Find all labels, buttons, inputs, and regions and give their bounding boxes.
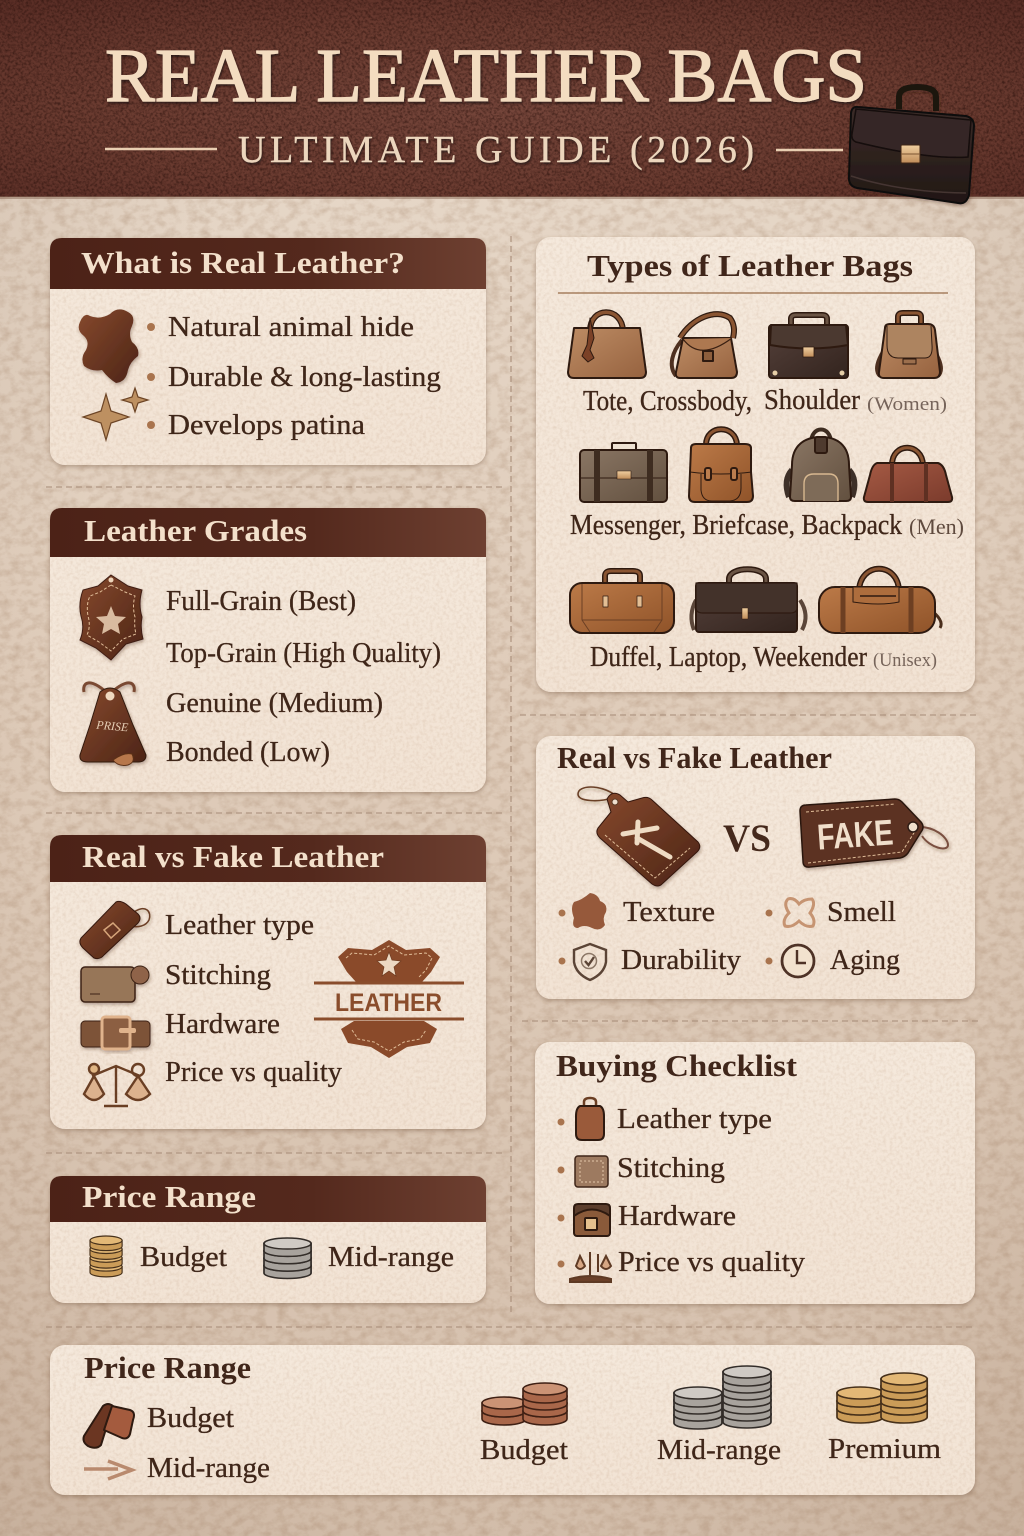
icon: shield check xyxy=(574,944,606,980)
heading: Real vs Fake Leather xyxy=(82,839,384,874)
icon: laptop bag xyxy=(691,569,806,632)
icon: hardware bag xyxy=(574,1204,610,1236)
text: top-grain: Top-Grain (High Quality) xyxy=(166,638,441,669)
text: premium label: Premium xyxy=(828,1434,941,1465)
panel: leather grades xyxy=(50,508,486,792)
icon: red duffel xyxy=(864,448,952,502)
icon: price bell tag: PRISE xyxy=(95,718,130,734)
icon: belt buckle xyxy=(81,1017,150,1049)
icon: gold coins xyxy=(837,1373,927,1423)
icon: clock xyxy=(782,945,814,977)
icon: backpack xyxy=(787,430,854,501)
panel: price range (bottom) xyxy=(50,1345,975,1495)
icon: black briefcase xyxy=(849,87,974,203)
text: shoulder: Shoulder xyxy=(764,385,861,416)
icon: star hide tag xyxy=(80,575,143,660)
icon: crossbody bag xyxy=(672,314,737,378)
text: stitching: Stitching xyxy=(165,960,271,991)
icon: fake leather tag xyxy=(800,799,948,867)
panel card xyxy=(50,508,486,792)
icon: messenger bag xyxy=(580,443,667,502)
header banner xyxy=(0,0,1024,203)
text: budget label: Budget xyxy=(480,1435,568,1466)
icon: real leather tag xyxy=(578,787,700,886)
icon: luggage tag xyxy=(80,901,150,959)
icon: duffel bag xyxy=(570,571,674,633)
icon: fake leather tag: FAKE xyxy=(816,811,895,858)
text: leather type: Leather type xyxy=(617,1104,772,1135)
icon: stitched square xyxy=(575,1156,608,1187)
icon: scales xyxy=(84,1064,150,1106)
text: mid-range label: Mid-range xyxy=(657,1435,781,1466)
text: hardware: Hardware xyxy=(165,1009,280,1040)
text: unisex: (Unisex) xyxy=(873,650,937,671)
heading: Buying Checklist xyxy=(556,1048,798,1083)
icon: arrow xyxy=(84,1461,132,1479)
text: patina: Develops patina xyxy=(168,410,366,441)
panel: types of leather bags xyxy=(536,237,975,692)
panel card xyxy=(50,1345,975,1495)
text: budget: Budget xyxy=(140,1242,227,1273)
text: durable: Durable & long-lasting xyxy=(168,362,441,393)
heading: Types of Leather Bags xyxy=(587,248,913,283)
text: price vs quality: Price vs quality xyxy=(165,1057,342,1088)
panel card xyxy=(50,238,486,465)
icon: women's backpack xyxy=(877,313,941,378)
subtitle: ULTIMATE GUIDE (2026) xyxy=(238,129,754,171)
text: mid-range: Mid-range xyxy=(328,1242,454,1273)
icon: copper coins xyxy=(482,1383,567,1425)
text: durability: Durability xyxy=(621,945,741,976)
text: texture: Texture xyxy=(623,897,715,928)
icon: gold coin stack xyxy=(90,1236,122,1277)
panel: price range (left) xyxy=(50,1176,486,1303)
icon: strap swatch xyxy=(84,1404,134,1448)
text: price vs quality: Price vs quality xyxy=(618,1247,805,1278)
heading bar xyxy=(50,508,486,557)
leather badge: LEATHER xyxy=(335,989,442,1017)
text: mid-range: Mid-range xyxy=(147,1453,270,1484)
icon: briefcase xyxy=(689,429,753,502)
panel card xyxy=(50,1176,486,1303)
text: duffel laptop weekender: Duffel, Laptop, Weekender xyxy=(590,642,868,673)
text: aging: Aging xyxy=(830,945,900,976)
subtitle right rule xyxy=(776,149,843,151)
icon: sparkles xyxy=(83,388,148,440)
text: bonded: Bonded (Low) xyxy=(166,737,330,768)
title: REAL LEATHER BAGS xyxy=(105,34,867,118)
icon: texture swatch xyxy=(572,893,606,929)
vs label: VS xyxy=(723,817,771,860)
panel: real vs fake leather (left) xyxy=(50,835,486,1129)
bullets xyxy=(558,1118,564,1268)
text: budget: Budget xyxy=(147,1403,234,1434)
panel card xyxy=(50,835,486,1129)
heading bar xyxy=(50,1176,486,1222)
text: leather type: Leather type xyxy=(165,910,314,941)
panel card xyxy=(535,1042,975,1304)
heading: Real vs Fake Leather xyxy=(557,740,832,775)
panel: what is real leather xyxy=(50,238,486,465)
text: smell: Smell xyxy=(827,897,896,928)
panel card xyxy=(536,736,975,999)
subtitle left rule xyxy=(105,148,217,150)
icon: smell cross xyxy=(784,899,814,926)
heading bar xyxy=(50,835,486,882)
text: men: (Men) xyxy=(909,514,964,539)
leather badge xyxy=(314,940,464,1058)
text: natural animal hide: Natural animal hide xyxy=(168,312,414,343)
icon: shoulder bag xyxy=(769,315,848,378)
heading: Price Range xyxy=(82,1179,256,1214)
heading: Price Range xyxy=(84,1350,251,1385)
text: stitching: Stitching xyxy=(617,1153,725,1184)
section divider lines xyxy=(46,236,978,1327)
text: genuine: Genuine (Medium) xyxy=(166,688,383,719)
heading bar xyxy=(50,238,486,289)
icon: price bell tag xyxy=(80,683,146,765)
text: full-grain: Full-Grain (Best) xyxy=(166,586,356,617)
icon: weekender bag xyxy=(819,569,941,633)
icon: tote bag xyxy=(568,312,646,378)
heading: What is Real Leather? xyxy=(81,245,405,280)
icon: stitched card xyxy=(81,966,149,1002)
panel: real vs fake leather (right) xyxy=(536,736,975,999)
icon: silver coin stack xyxy=(264,1238,311,1278)
panel: buying checklist xyxy=(535,1042,975,1304)
icon: small scales xyxy=(570,1252,611,1282)
text: tote, crossbody: Tote, Crossbody, xyxy=(583,386,752,417)
text: messenger briefcase backpack: Messenger, Briefcase, Backpack xyxy=(570,510,902,541)
icon: small bag xyxy=(576,1098,604,1140)
heading: Leather Grades xyxy=(84,513,307,548)
panel card xyxy=(536,237,975,692)
bullets xyxy=(558,910,772,964)
icon: silver coins xyxy=(674,1366,771,1429)
text: women: (Women) xyxy=(867,394,947,415)
text: hardware: Hardware xyxy=(618,1201,736,1232)
heading rule xyxy=(558,292,948,294)
icon: leather hide xyxy=(79,309,138,383)
bullets xyxy=(147,323,155,429)
